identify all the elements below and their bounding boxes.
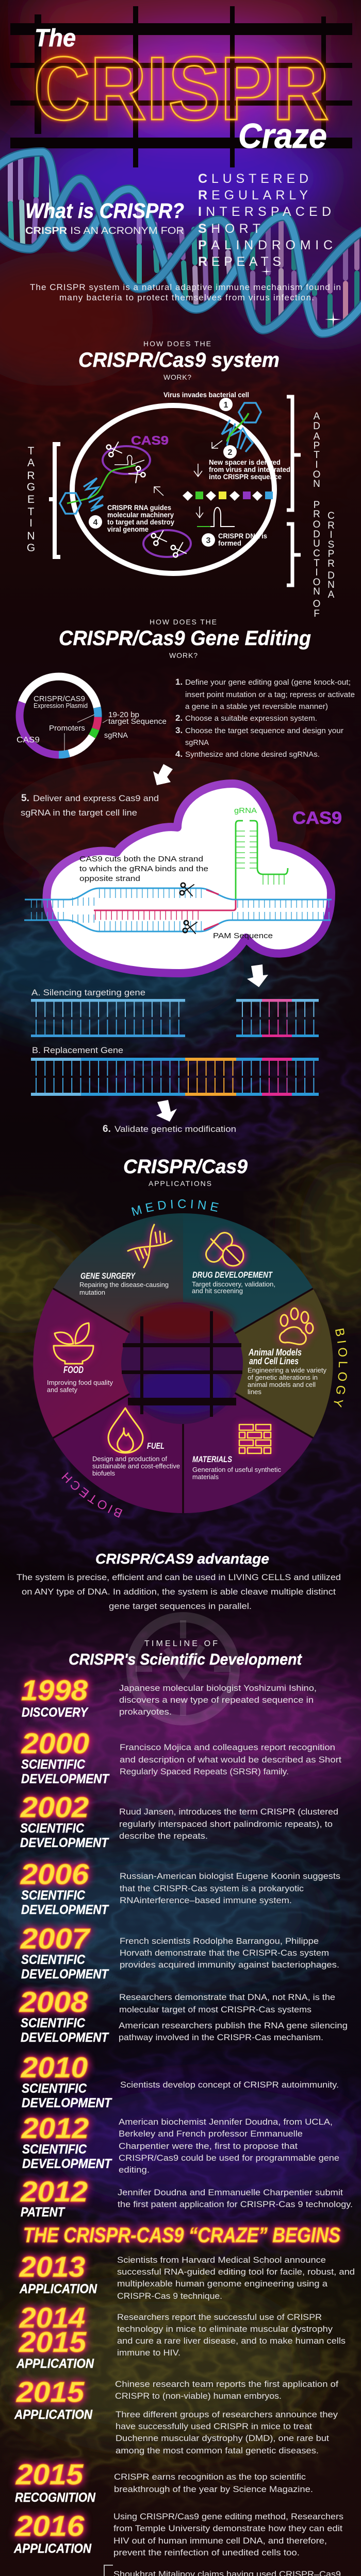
block: gene surgery: Repairing the disease-causing bbox=[79, 1281, 169, 1289]
timeline 2013 bbox=[19, 2250, 355, 2301]
icon: paw bbox=[280, 1308, 313, 1344]
heading: how does gene editing work: CRISPR/Cas9 Gene Editing bbox=[59, 627, 311, 650]
chart: applications wheel bbox=[33, 1199, 348, 1518]
cell membrane bbox=[72, 405, 274, 573]
timeline 2007: SCIENTIFIC bbox=[21, 1953, 86, 1967]
timeline 2008: pathway involved in the CRISPR-Cas mechanism. bbox=[119, 2032, 323, 2042]
heading: how does the system work bbox=[78, 340, 280, 381]
timeline 2012 science: American biochemist Jennifer Doudna, from UCLA, bbox=[119, 2117, 333, 2127]
CRISPR array bbox=[183, 491, 273, 501]
timeline 2002: describe the repeats. bbox=[119, 1831, 208, 1841]
heading B: B. Replacement Gene bbox=[32, 1045, 123, 1055]
label: MEDICINE: MEDICINE bbox=[131, 1199, 219, 1216]
title: The: The bbox=[35, 25, 76, 52]
DNA strands bbox=[24, 888, 332, 931]
timeline 2006: Russian-American biologist Eugene Koonin suggests bbox=[120, 1871, 340, 1881]
steps 1-4 list: a gene in a stable yet reversible manner) bbox=[185, 702, 328, 711]
badge 1 bbox=[219, 398, 233, 411]
badge 4 bbox=[89, 515, 102, 529]
timeline 2015 application: CRISPR to (non-viable) human embryos. bbox=[115, 2391, 282, 2401]
block: fuel: biofuels bbox=[92, 1469, 115, 1477]
badge 2 bbox=[223, 445, 237, 459]
smoke: yellow left bbox=[0, 1211, 119, 1386]
caption step 4: molecular machinery bbox=[107, 511, 174, 519]
bracket: production bbox=[287, 524, 301, 585]
vertical label: adaption: ADAPTION bbox=[313, 411, 320, 489]
timeline 2002: 2002 bbox=[20, 1791, 89, 1823]
icon: DNA bbox=[128, 1225, 172, 1267]
timeline 2012 science: 2012 bbox=[21, 2112, 89, 2144]
block: gene surgery bbox=[79, 1271, 169, 1296]
caption step 4: CRISPR RNA guides bbox=[107, 503, 171, 512]
heading: What is CRISPR?: What is CRISPR? bbox=[25, 199, 184, 223]
caption step 4: viral genome bbox=[107, 525, 149, 533]
arrow: to step 5 bbox=[153, 764, 173, 785]
timeline 2000: and description of what would be described as Short bbox=[120, 1755, 341, 1765]
label: BIOLOGY: BIOLOGY bbox=[334, 1328, 348, 1408]
smoke: olive bbox=[0, 2246, 361, 2494]
arrow: to A/B bbox=[247, 964, 268, 987]
timeline 2002: Ruud Jansen, introduces the term CRISPR (clustered bbox=[119, 1807, 338, 1817]
steps 1-4 list: 3. bbox=[175, 725, 183, 735]
timeline 2012 patent bbox=[20, 2175, 353, 2219]
timeline 2000: SCIENTIFIC bbox=[21, 1757, 86, 1772]
steps 1-4 list: Choose the target sequence and design your bbox=[185, 726, 343, 735]
timeline 2016: from Temple University demonstrate how they can edit bbox=[113, 2523, 342, 2533]
timeline 2008 bbox=[19, 1986, 348, 2045]
timeline 2008: 2008 bbox=[19, 1986, 88, 2018]
timeline 2015 application: APPLICATION bbox=[14, 2408, 93, 2422]
steps 1-4 list: sgRNA bbox=[185, 738, 209, 747]
cloud caption: opposite strand bbox=[79, 874, 140, 883]
timeline 2015 recognition: 2015 bbox=[15, 2458, 84, 2490]
timeline 2012 patent: PATENT bbox=[21, 2205, 65, 2219]
timeline 2014-2015: immune to HIV. bbox=[117, 2348, 180, 2358]
timeline 2006 bbox=[20, 1858, 340, 1917]
block: animal models: and Cell Lines bbox=[249, 1356, 299, 1366]
advantage paragraph: on ANY type of DNA. In addition, the system is able cleave multiple distinct bbox=[22, 1587, 336, 1597]
timeline 2008: SCIENTIFIC bbox=[21, 2016, 86, 2030]
block: animal models: lines bbox=[248, 1388, 261, 1396]
timeline 2002: DEVELOPMENT bbox=[20, 1836, 109, 1850]
diagram: Cas9 cloud bbox=[24, 784, 332, 973]
timeline 2008: DEVELOPMENT bbox=[21, 2030, 109, 2045]
title: Craze: Craze bbox=[238, 116, 327, 156]
timeline 2006: that the CRISPR-Cas system is a prokaryotic bbox=[120, 1884, 304, 1893]
gRNA hairpin bbox=[236, 821, 288, 899]
icon: virus right bbox=[222, 403, 261, 452]
heading: how does gene editing work bbox=[59, 618, 311, 659]
timeline 2010: DEVELOPMENT bbox=[22, 2096, 112, 2110]
arrow NW bbox=[154, 487, 163, 496]
timeline 2010: SCIENTIFIC bbox=[22, 2081, 87, 2096]
arrow down 2 bbox=[196, 506, 203, 518]
timeline 2008: American researchers publish the RNA gene silencing bbox=[119, 2021, 348, 2030]
timeline 2014-2015: Researchers report the successful use of CRISPR bbox=[117, 2312, 322, 2322]
icon: bricks bbox=[239, 1425, 271, 1453]
Cas9 complex upper bbox=[67, 440, 150, 503]
timeline 2016: 2016 bbox=[15, 2510, 85, 2542]
timeline 2016: HIV out of human immune cell DNA, and therefore, bbox=[113, 2536, 327, 2546]
heading: timeline bbox=[69, 1639, 303, 1668]
smoke: red bbox=[10, 335, 351, 510]
plasmid labels: Promoters bbox=[49, 724, 85, 733]
timeline 2012 science: Berkeley and French professor Emmanuelle bbox=[119, 2129, 303, 2139]
timeline 2012 science: CRISPR/Cas9 could be used for programmable gene bbox=[119, 2153, 339, 2163]
icon: flame bbox=[108, 1408, 143, 1453]
timeline 2010 bbox=[21, 2051, 339, 2110]
Cas9 complex lower bbox=[143, 529, 191, 558]
acronym list: R EGULARLY bbox=[198, 188, 308, 202]
plasmid labels bbox=[17, 694, 167, 744]
step 6: Validate genetic modification bbox=[114, 1124, 236, 1134]
acronym list: P ALINDROMIC bbox=[198, 238, 333, 252]
timeline 2014-2015: technology in mice to eliminate muscular dystrophy bbox=[117, 2324, 333, 2334]
sector: fuel bbox=[53, 1363, 183, 1513]
timeline 2016: Using CRISPR/Cas9 gene editing method, Researchers bbox=[113, 2512, 343, 2521]
vertical label: CRISPR DNA: CRISPR DNA bbox=[327, 511, 335, 600]
heading: how does gene editing work: WORK? bbox=[169, 651, 199, 659]
label: CAS9 outside cloud: CAS9 bbox=[292, 808, 342, 828]
arrow down bbox=[194, 464, 202, 477]
smoke: purple bbox=[88, 1030, 361, 1164]
label: CAS9: CAS9 bbox=[131, 434, 169, 448]
heading: how does the system work: WORK? bbox=[163, 373, 193, 381]
timeline 2002: SCIENTIFIC bbox=[20, 1821, 85, 1836]
icon: clock watermark bbox=[132, 1617, 235, 1720]
heading: advantage: CRISPR/CAS9 advantage bbox=[95, 1551, 269, 1567]
steps 1-4 list: insert point mutation or a tag; repress or activate bbox=[185, 690, 355, 699]
timeline 2010: Scientists develop concept of CRISPR autoimmunity. bbox=[120, 2080, 339, 2090]
timeline 2000 bbox=[21, 1727, 341, 1786]
scissors bbox=[180, 883, 197, 934]
timeline 2002 bbox=[20, 1791, 338, 1850]
timeline 2014-2015: APPLICATION bbox=[16, 2357, 94, 2371]
timeline 2014-2015: and cure a rare liver disease, and to make human cells bbox=[117, 2336, 346, 2346]
block: drug development: DRUG DEVELOPEMENT bbox=[192, 1270, 273, 1280]
block: fuel: Design and production of bbox=[92, 1455, 167, 1463]
badge 4: 4 bbox=[93, 518, 98, 527]
timeline 2007: French scientists Rodolphe Barrangou, Philippe bbox=[120, 1936, 319, 1946]
icon: pills bbox=[203, 1230, 243, 1266]
advantage paragraph: gene target sequences in parallel. bbox=[109, 1601, 252, 1611]
diagram A: silencing bbox=[31, 999, 319, 1037]
timeline 2006: SCIENTIFIC bbox=[21, 1888, 86, 1903]
heading: how does the system work: CRISPR/Cas9 system bbox=[78, 349, 280, 371]
acronym list: S HORT bbox=[198, 222, 260, 236]
step 5 text bbox=[21, 793, 159, 818]
timeline 2006: RNAinterference–based immune system. bbox=[120, 1895, 292, 1905]
sector: biology bbox=[183, 1289, 333, 1438]
block: drug development: and hit screening bbox=[192, 1287, 243, 1295]
chart: expression plasmid bbox=[17, 676, 167, 755]
arrow: to step 6 bbox=[156, 1100, 177, 1122]
inner sign image bbox=[121, 1302, 243, 1424]
caption step 4 bbox=[107, 503, 174, 533]
diagram B: replacement bbox=[31, 1058, 319, 1096]
timeline 2014-2015: 2015 bbox=[19, 2326, 87, 2358]
timeline 2014-2015 bbox=[16, 2301, 346, 2371]
timeline 2015 application: among the most common fatal genetic diseases. bbox=[116, 2446, 319, 2455]
timeline 2013: multiplexable human genome engineering using a bbox=[117, 2279, 328, 2289]
heading: how does the system work: HOW DOES THE bbox=[143, 340, 212, 348]
timeline 2015 application bbox=[14, 2376, 338, 2455]
timeline 2014-2015: 2014 bbox=[19, 2301, 85, 2334]
heading: applications: APPLICATIONS bbox=[149, 1179, 213, 1188]
caption step 2: into CRISPR sequence bbox=[209, 472, 282, 481]
block: animal models: Animal Models bbox=[248, 1347, 302, 1358]
sector: medicine right bbox=[183, 1213, 313, 1363]
smoke: red lower bbox=[5, 690, 356, 938]
block: animal models bbox=[248, 1347, 326, 1396]
timeline 2013: successful RNA-guided editing tool for facile, robust, and bbox=[117, 2267, 355, 2277]
plasmid labels: sgRNA bbox=[104, 731, 128, 740]
timeline 2012 patent: 2012 bbox=[20, 2175, 88, 2208]
vertical label: targeting: TARGETING bbox=[27, 445, 35, 554]
block: gene surgery: mutation bbox=[79, 1289, 105, 1296]
block: gene surgery: GENE SURGERY bbox=[80, 1271, 136, 1281]
advantage paragraph bbox=[17, 1572, 341, 1611]
step 6: 6. bbox=[103, 1124, 111, 1134]
block: fuel: FUEL bbox=[147, 1441, 165, 1451]
block: animal models: of genetic alterations in bbox=[248, 1374, 318, 1381]
block: animal models: animal models and cell bbox=[248, 1381, 316, 1388]
cloud caption: CAS9 cuts both the DNA strand bbox=[79, 855, 203, 863]
timeline 1998 bbox=[21, 1674, 317, 1720]
timeline 1998: Japanese molecular biologist Yoshizumi Ishino, bbox=[119, 1683, 317, 1693]
smoke: blue timeline bbox=[0, 1793, 361, 2020]
timeline 2016: APPLICATION bbox=[13, 2541, 92, 2556]
caption step 2: New spacer is derived bbox=[209, 458, 281, 466]
smoke: purple lower bbox=[0, 1406, 361, 1582]
bracket: adaption bbox=[287, 397, 301, 510]
timeline 1998: prokaryotes. bbox=[119, 1707, 172, 1717]
timeline 2015 application: 2015 bbox=[16, 2376, 85, 2408]
timeline 2013: Scientists from Harvard Medical School announce bbox=[117, 2255, 326, 2265]
caption step 3: CRISPR DNA is bbox=[218, 532, 267, 540]
block: fuel: sustainable and cost-effective bbox=[92, 1462, 180, 1470]
badge 2: 2 bbox=[228, 448, 233, 457]
timeline 2015 recognition bbox=[15, 2458, 313, 2505]
block: food bbox=[47, 1365, 113, 1394]
timeline 2000: Francisco Mojica and colleagues report recognition bbox=[120, 1742, 335, 1752]
caption step 2: from virus and integrated bbox=[209, 465, 290, 473]
intro paragraph: many bacteria to protect themselves from virus infection. bbox=[59, 293, 314, 302]
heading: applications bbox=[123, 1156, 248, 1188]
timeline 2000: 2000 bbox=[21, 1727, 89, 1759]
sector: medicine left bbox=[53, 1213, 183, 1363]
caption step 3: formed bbox=[218, 539, 241, 547]
heading: timeline: CRISPR's Scientific Development bbox=[69, 1650, 303, 1668]
plasmid labels: CRISPR/CAS9 bbox=[34, 694, 85, 703]
caption step 4: to target and destroy bbox=[107, 518, 174, 526]
icon: food bowl bbox=[54, 1323, 93, 1364]
plasmid labels: 19-20 bp bbox=[108, 710, 139, 719]
bracket: targeting bbox=[49, 444, 60, 557]
timeline 2016: prevent the reinfection of unedited cells too. bbox=[113, 2548, 300, 2557]
timeline 2012 patent: the first patent application for CRISPR-Cas 9 technology. bbox=[118, 2199, 353, 2209]
intro paragraph: The CRISPR system is a natural adaptive immune mechanism found in bbox=[30, 282, 341, 292]
timeline 2007: provides acquired immunity against bacteriophages. bbox=[120, 1960, 339, 1970]
timeline 2010: 2010 bbox=[21, 2051, 88, 2083]
block: materials: materials bbox=[192, 1473, 219, 1481]
sector: materials bbox=[183, 1363, 313, 1513]
steps 1-4 list: 4. bbox=[175, 749, 183, 759]
badge 1: 1 bbox=[224, 401, 228, 410]
timeline 2015 recognition: CRISPR earns recognition as the top scientific bbox=[114, 2472, 306, 2482]
acronym list: C LUSTERED bbox=[198, 172, 308, 186]
plasmid labels: Expression Plasmid bbox=[34, 702, 88, 709]
timeline 2015 recognition: RECOGNITION bbox=[15, 2490, 96, 2505]
timeline 2002: regularly interspaced short palindromic repeats), to bbox=[119, 1819, 333, 1829]
sparkle flares bbox=[261, 266, 341, 328]
timeline 2016 bbox=[13, 2510, 343, 2557]
label: BIOTECH: BIOTECH bbox=[61, 1472, 123, 1518]
advantage paragraph: The system is precise, efficient and can be used in LIVING CELLS and utilized bbox=[17, 1572, 341, 1582]
heading: timeline: TIMELINE OF bbox=[144, 1639, 219, 1648]
timeline 2015 application: Duchenne muscular dystrophy (DMD), one rare but bbox=[116, 2433, 329, 2443]
block: materials bbox=[192, 1454, 281, 1481]
icon: virus left bbox=[60, 478, 103, 514]
acronym list: R EPEATS bbox=[198, 255, 281, 269]
subheading: acronym: CRISPR IS AN ACRONYM FOR bbox=[25, 226, 184, 236]
block: animal models: Engineering a wide variety bbox=[248, 1366, 326, 1374]
steps 1-4 list: Define your gene editing goal (gene knock-out; bbox=[185, 678, 351, 687]
diagram: CRISPR/Cas9 cell cycle bbox=[60, 391, 290, 573]
block: drug development bbox=[192, 1270, 275, 1295]
timeline 2015 application: have successfully used CRISPR in mice to treat bbox=[116, 2421, 312, 2431]
timeline 2012 patent: Jennifer Doudna and Emmanuelle Charpentier submit bbox=[118, 2188, 343, 2197]
block: fuel bbox=[92, 1441, 180, 1477]
plasmid labels: CAS9 bbox=[17, 736, 40, 744]
step 5 text: 5. bbox=[21, 793, 29, 804]
steps 1-4 list: Choose a suitable expression system. bbox=[185, 714, 317, 723]
timeline 2017 bbox=[15, 2565, 358, 2576]
timeline 2013: 2013 bbox=[19, 2250, 85, 2283]
steps 1-4 list: 1. bbox=[175, 677, 183, 687]
timeline 2012 science bbox=[21, 2112, 339, 2175]
acronym list: I NTERSPACED bbox=[198, 205, 331, 219]
block: food: FOOD bbox=[63, 1365, 84, 1375]
arrow bbox=[212, 440, 222, 448]
caption: virus invades: Virus invades bacterial cell bbox=[163, 391, 249, 399]
caption step 2 bbox=[209, 458, 290, 481]
badge 3: 3 bbox=[206, 536, 211, 545]
timeline 2015 recognition: breakthrough of the year by Science Magazine. bbox=[114, 2484, 313, 2494]
timeline 2012 science: SCIENTIFIC bbox=[22, 2142, 87, 2157]
timeline 2006: 2006 bbox=[20, 1858, 89, 1890]
timeline 1998: 1998 bbox=[21, 1674, 88, 1706]
heading: how does gene editing work: HOW DOES THE bbox=[150, 618, 218, 626]
heading: applications: CRISPR/Cas9 bbox=[123, 1156, 248, 1178]
steps 1-4 list: 2. bbox=[175, 713, 183, 723]
smoke: magenta bbox=[0, 1633, 361, 1808]
block: materials: Generation of useful synthetic bbox=[192, 1466, 281, 1473]
timeline 2013: CRISPR-Cas 9 technique. bbox=[117, 2291, 222, 2301]
timeline 2012 science: Charpentier were the, first to propose that bbox=[119, 2141, 298, 2151]
timeline 2000: Regularly Spaced Repeats (SRSR) family. bbox=[120, 1767, 289, 1776]
timeline 1998: DISCOVERY bbox=[22, 1705, 89, 1720]
timeline 2007: 2007 bbox=[20, 1922, 91, 1955]
intro paragraph bbox=[30, 282, 341, 302]
block: food: and safety bbox=[47, 1386, 77, 1394]
timeline 2015 application: Three different groups of researchers announce they bbox=[116, 2410, 338, 2419]
plasmid labels: target Sequence bbox=[108, 717, 167, 726]
label: PAM: PAM Sequence bbox=[213, 931, 273, 940]
sector: food bbox=[33, 1289, 183, 1438]
block: food: Improving food quality bbox=[47, 1379, 113, 1386]
timeline 2015 application: Chinese research team reports the first application of bbox=[115, 2379, 338, 2389]
step 5 text: Deliver and express Cas9 and bbox=[33, 793, 159, 803]
timeline 2012 science: DEVELOPMENT bbox=[22, 2157, 112, 2171]
timeline 2008: Researchers demonstrate that DNA, not RNA, is the bbox=[119, 1992, 335, 2002]
heading A: A. Silencing targeting gene bbox=[31, 988, 145, 997]
timeline 2007: DEVELOPMENT bbox=[21, 1967, 109, 1981]
cloud caption bbox=[79, 855, 208, 883]
crRNA hairpin bbox=[197, 507, 235, 527]
smoke: purple timeline bbox=[21, 2050, 361, 2257]
timeline 2013: APPLICATION bbox=[19, 2282, 97, 2296]
timeline 2008: molecular target of most CRISPR-Cas systems bbox=[119, 2005, 311, 2014]
timeline 2012 science: editing. bbox=[119, 2165, 150, 2175]
cloud caption: to which the gRNA binds and the bbox=[79, 865, 208, 873]
smoke: yellow right bbox=[268, 1118, 361, 1334]
steps 1-4 list bbox=[175, 677, 355, 759]
block: materials: MATERIALS bbox=[192, 1454, 233, 1464]
timeline 2000: DEVELOPMENT bbox=[21, 1772, 110, 1786]
timeline 2006: DEVELOPMENT bbox=[21, 1903, 109, 1917]
acronym list bbox=[198, 172, 333, 269]
badge 3 bbox=[202, 533, 215, 547]
timeline 2007: Horvath demonstrate that the CRISPR-Cas system bbox=[120, 1948, 329, 1958]
vertical label: production of: PRODUCTION OF bbox=[313, 500, 320, 619]
label: gRNA: gRNA bbox=[234, 806, 257, 815]
block: drug development: Target discovery, validation, bbox=[192, 1280, 275, 1288]
step 5 text: sgRNA in the target cell line bbox=[21, 808, 137, 818]
caption step 3 bbox=[218, 532, 267, 547]
sign mounting grid bbox=[10, 6, 352, 167]
smoke: blue bbox=[0, 866, 340, 1061]
timeline 2007 bbox=[20, 1922, 339, 1981]
steps 1-4 list: Synthesize and clone desired sgRNAs. bbox=[185, 750, 320, 759]
DNA helix illustration bbox=[0, 152, 361, 333]
timeline 1998: discovers a new type of repeated sequence in bbox=[119, 1695, 314, 1705]
